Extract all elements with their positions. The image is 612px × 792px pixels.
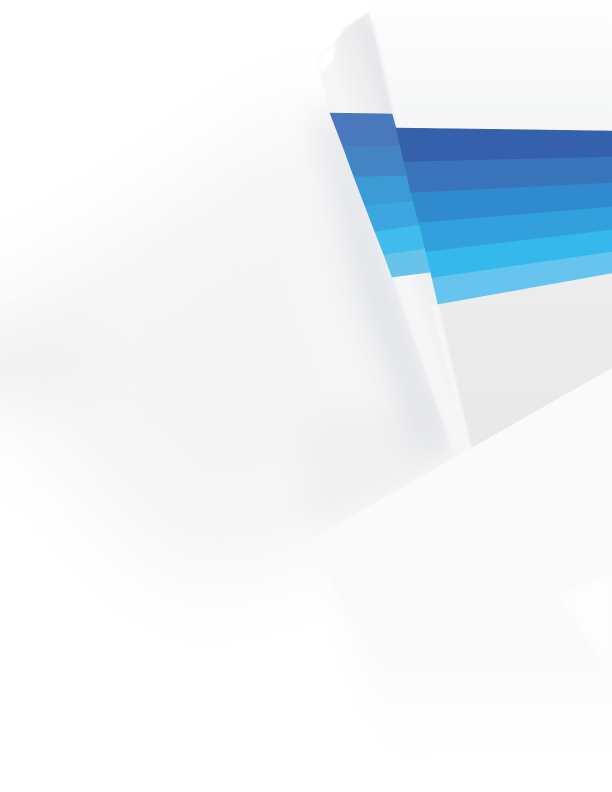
bottom fade to white [0,660,612,770]
curled tip highlight [318,45,336,72]
roll cast shadow [315,110,455,450]
rolled paper strip [318,12,471,457]
blue stripes on main page [396,128,612,304]
soft shadow behind the paper [0,90,540,792]
lower left fold beneath front sheet [330,590,440,750]
back panel: upper right page [368,0,612,450]
inner fold on front sheet [558,574,612,680]
fold shadow on the roll edge [362,22,396,128]
front paper sheet [308,368,612,792]
blue stripes on rolled strip [330,113,431,277]
lower fold edge [431,304,471,451]
